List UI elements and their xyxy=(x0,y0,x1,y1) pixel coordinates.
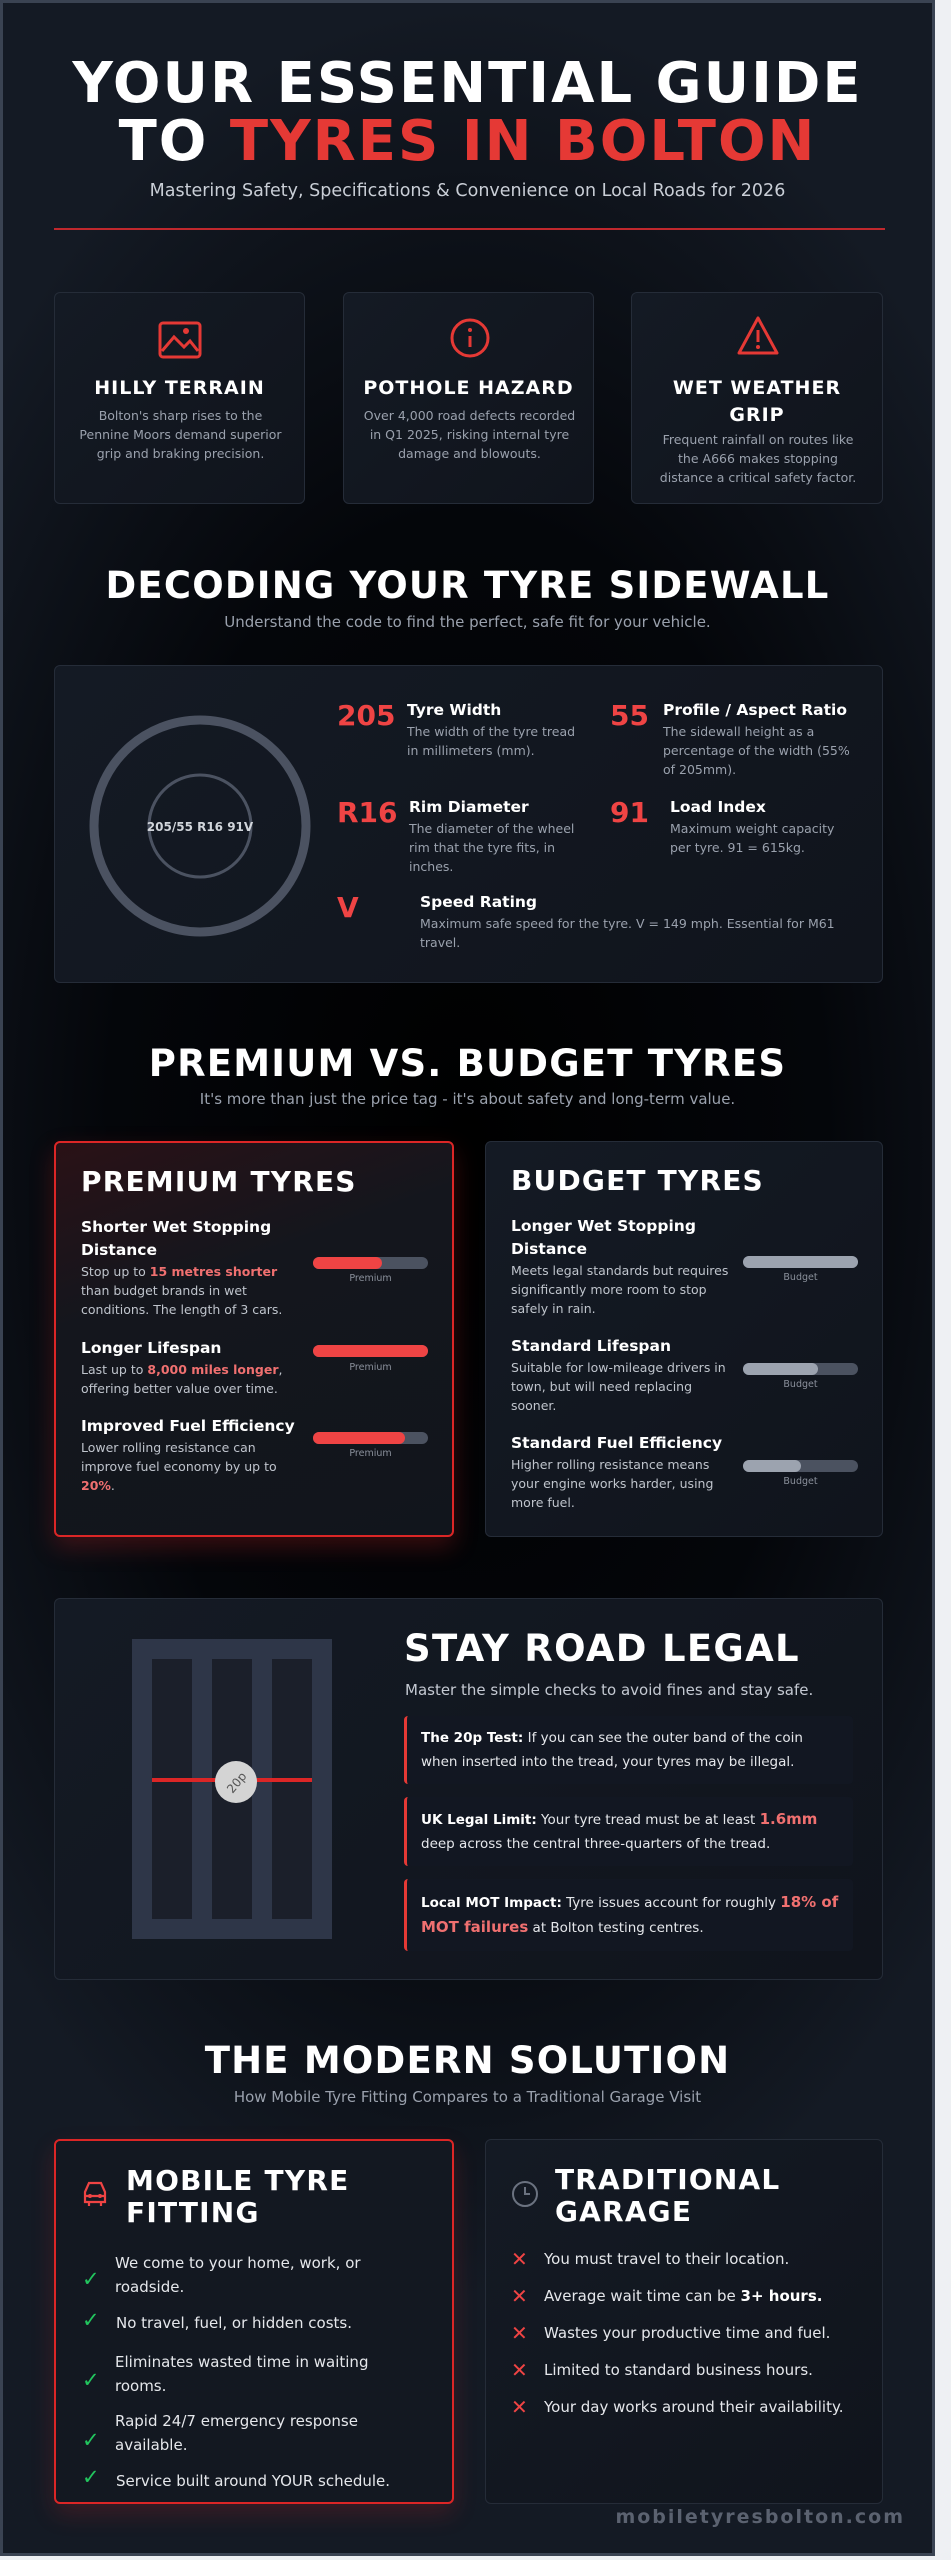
item: fuel: Higher rolling resistance means your engine works harder, using more fuel. xyxy=(511,1457,713,1510)
heading: PREMIUM TYRES xyxy=(81,1165,357,1198)
heading xyxy=(555,2163,780,2228)
spec: 55 xyxy=(610,699,850,777)
heading: FITTING xyxy=(126,2196,260,2229)
list: benefits: Eliminates wasted time in waiting rooms. xyxy=(115,2353,368,2395)
panel: sidewall: Rim Diameter xyxy=(409,798,529,816)
item: lifespan: Last up to 8,000 miles longer, offering better value over time. xyxy=(81,1362,282,1396)
heading: sidewall: DECODING YOUR TYRE SIDEWALL xyxy=(105,564,830,607)
list: benefits: ✓ xyxy=(82,2465,100,2489)
heading: BUDGET TYRES xyxy=(511,1164,764,1197)
item: lifespan: Standard Lifespan xyxy=(511,1337,671,1355)
heading: GRIP xyxy=(729,404,785,426)
list: benefits: Rapid 24/7 emergency response available. xyxy=(115,2412,358,2454)
list: drawbacks: ✕ xyxy=(511,2247,528,2271)
panel: sidewall: 55 xyxy=(610,699,649,732)
subtitle: Mastering Safety, Specifications & Convenience on Local Roads for 2026 xyxy=(150,181,785,201)
panel: sidewall: Profile / Aspect Ratio xyxy=(663,701,847,719)
card: wet weather xyxy=(631,292,883,504)
list: drawbacks: ✕ xyxy=(511,2284,528,2308)
panel: sidewall: Speed Rating xyxy=(420,893,537,911)
panel: premium xyxy=(54,1141,454,1537)
list: drawbacks: ✕ xyxy=(511,2321,528,2345)
list: benefits: ✓ xyxy=(82,2368,100,2392)
panel: mobile xyxy=(54,2139,454,2504)
item: lifespan: Premium xyxy=(349,1362,392,1373)
panel: sidewall: Tyre Width xyxy=(407,701,501,719)
spec: 91 xyxy=(610,796,834,855)
tyre diagram: 205/55 R16 91V xyxy=(147,820,254,834)
panel: sidewall: Maximum safe speed for the tyre. V = 149 mph. Essential for M61 travel. xyxy=(420,916,835,950)
subheading: Understand the code to find the perfect, safe fit for your vehicle. xyxy=(224,613,711,631)
item: fuel: Premium xyxy=(349,1448,392,1459)
list: benefits: We come to your home, work, or roadside. xyxy=(115,2254,361,2296)
item: lifespan xyxy=(511,1337,858,1413)
item: lifespan xyxy=(81,1339,428,1396)
list: drawbacks: Your day works around their availability. xyxy=(544,2398,843,2416)
card: hilly terrain xyxy=(54,292,305,504)
item: fuel: Standard Fuel Efficiency xyxy=(511,1434,722,1452)
footer: website: mobiletyresbolton.com xyxy=(615,2506,905,2528)
list: drawbacks: Wastes your productive time and fuel. xyxy=(544,2324,830,2342)
panel: sidewall: 91 xyxy=(610,796,649,829)
text: Over 4,000 road defects recorded in Q1 2025, risking internal tyre damage and blowouts. xyxy=(364,408,575,461)
list: benefits: ✓ xyxy=(82,2267,100,2291)
title: TO TYRES IN BOLTON xyxy=(119,109,816,174)
panel: sidewall: The diameter of the wheel rim that the tyre fits, in inches. xyxy=(409,821,574,874)
panel: sidewall: The width of the tyre tread in millimeters (mm). xyxy=(407,724,575,758)
callout: 20p test xyxy=(404,1716,853,1784)
item: wet stopping: Longer Wet Stopping Distance xyxy=(511,1217,696,1258)
heading: MOBILE TYRE xyxy=(126,2164,349,2197)
item: wet stopping: Shorter Wet Stopping Distance xyxy=(81,1218,271,1259)
callout: 20p test: The 20p Test: If you can see the outer band of the coin when inserted into the tread, your tyres may be illegal. xyxy=(421,1730,803,1770)
heading: HILLY TERRAIN xyxy=(94,377,265,399)
list: benefits: No travel, fuel, or hidden costs. xyxy=(116,2314,352,2332)
panel: sidewall: Load Index xyxy=(670,798,766,816)
list: benefits: Service built around YOUR schedule. xyxy=(116,2472,390,2490)
heading: premium vs budget: PREMIUM VS. BUDGET TYRES xyxy=(149,1042,786,1085)
item: fuel xyxy=(81,1417,428,1493)
icon: image xyxy=(158,322,202,358)
card: pothole hazard xyxy=(343,292,594,504)
panel: sidewall: 205 xyxy=(337,699,395,732)
panel: budget xyxy=(485,1141,883,1537)
item: lifespan: Suitable for low-mileage drivers in town, but will need replacing sooner. xyxy=(511,1360,726,1413)
list: drawbacks: ✕ xyxy=(511,2358,528,2382)
heading: TRADITIONAL xyxy=(555,2163,780,2196)
list: drawbacks: ✕ xyxy=(511,2395,528,2419)
callout: MOT xyxy=(404,1879,853,1951)
heading: POTHOLE HAZARD xyxy=(363,377,574,399)
tread diagram: 20p xyxy=(224,1769,249,1796)
callout: legal limit xyxy=(404,1797,853,1866)
list: benefits: ✓ xyxy=(82,2428,100,2452)
item: wet stopping xyxy=(511,1217,858,1316)
icon: warning xyxy=(738,316,779,354)
icon: info xyxy=(450,318,490,358)
spec: V xyxy=(337,891,835,950)
title xyxy=(72,51,863,174)
item: fuel: Budget xyxy=(783,1476,818,1487)
icon: car xyxy=(84,2182,106,2206)
title: YOUR ESSENTIAL GUIDE xyxy=(72,51,863,116)
item: fuel xyxy=(511,1434,858,1510)
item: wet stopping: Meets legal standards but requires significantly more room to stop safely in rain. xyxy=(511,1263,728,1316)
text: Bolton's sharp rises to the Pennine Moors demand superior grip and braking precision. xyxy=(79,408,282,461)
text: Frequent rainfall on routes like the A666 makes stopping distance a critical safety factor. xyxy=(660,432,856,485)
panel: sidewall: Maximum weight capacity per tyre. 91 = 615kg. xyxy=(670,821,834,855)
heading: GARAGE xyxy=(555,2195,692,2228)
panel: traditional xyxy=(485,2139,883,2504)
panel: sidewall: The sidewall height as a percentage of the width (55% of 205mm). xyxy=(663,724,850,777)
list: benefits xyxy=(82,2254,390,2490)
heading xyxy=(673,377,841,426)
item: lifespan: Budget xyxy=(783,1379,818,1390)
tread diagram xyxy=(132,1639,332,1939)
list: drawbacks xyxy=(511,2247,843,2419)
spec: 205 xyxy=(337,699,575,758)
callout: legal limit: UK Legal Limit: Your tyre tread must be at least 1.6mm deep across the central three-quarters of the tread. xyxy=(421,1810,817,1852)
panel: stay road legal xyxy=(54,1598,883,1980)
spec: R16 xyxy=(337,796,574,874)
panel: sidewall: V xyxy=(337,891,359,924)
item: wet stopping xyxy=(81,1218,428,1317)
heading: modern solution: THE MODERN SOLUTION xyxy=(205,2039,730,2082)
item: fuel: Lower rolling resistance can improve fuel economy by up to 20%. xyxy=(81,1440,277,1493)
heading xyxy=(126,2164,349,2229)
callout: MOT: Local MOT Impact: Tyre issues account for roughly 18% of MOT failures at Bolton testing centres. xyxy=(421,1893,838,1936)
heading: WET WEATHER xyxy=(673,377,841,399)
item: wet stopping: Stop up to 15 metres shorter than budget brands in wet conditions. The length of 3 cars. xyxy=(81,1264,282,1317)
heading: STAY ROAD LEGAL xyxy=(404,1627,800,1670)
item: wet stopping: Budget xyxy=(783,1272,818,1283)
subheading: It's more than just the price tag - it's about safety and long-term value. xyxy=(200,1090,735,1108)
list: drawbacks: Average wait time can be 3+ hours. xyxy=(544,2287,822,2305)
list: drawbacks: Limited to standard business hours. xyxy=(544,2361,813,2379)
list: benefits: ✓ xyxy=(82,2308,100,2332)
list: drawbacks: You must travel to their location. xyxy=(544,2250,789,2268)
item: wet stopping: Premium xyxy=(349,1273,392,1284)
item: fuel: Improved Fuel Efficiency xyxy=(81,1417,295,1435)
tyre diagram xyxy=(90,716,310,936)
subheading: How Mobile Tyre Fitting Compares to a Traditional Garage Visit xyxy=(234,2088,701,2106)
item: lifespan: Longer Lifespan xyxy=(81,1339,221,1357)
panel: sidewall: R16 xyxy=(337,796,398,829)
panel: sidewall xyxy=(54,665,883,983)
icon: clock xyxy=(512,2181,538,2207)
subheading: Master the simple checks to avoid fines and stay safe. xyxy=(405,1681,813,1699)
